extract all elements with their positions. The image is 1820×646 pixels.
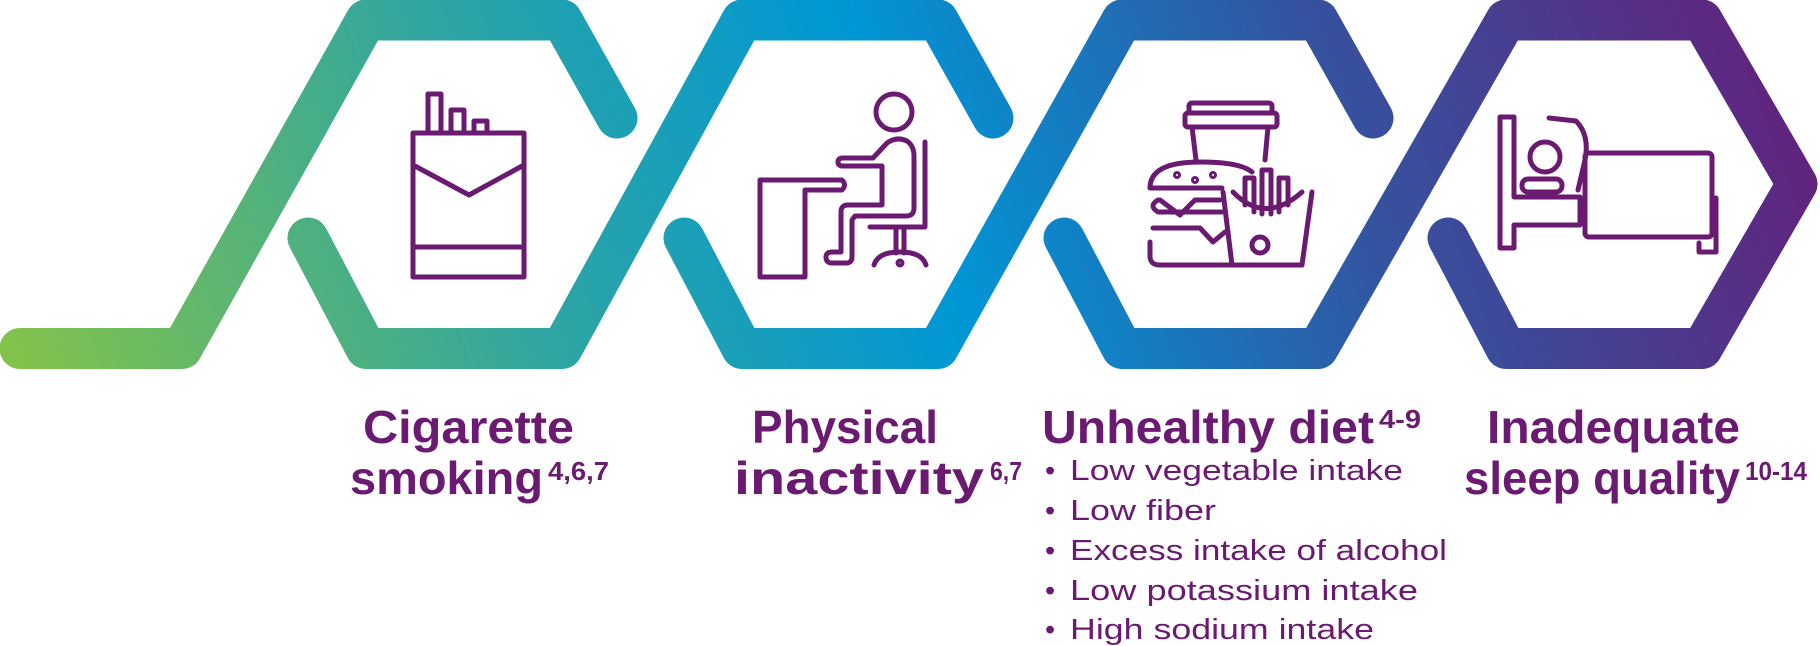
bullet list: diet factors: • [1045, 535, 1055, 567]
label: cigarette smoking: Cigarette [363, 401, 574, 453]
label: inadequate sleep quality: 10-14 [1745, 456, 1808, 486]
label: inadequate sleep quality: sleep quality [1464, 452, 1740, 504]
label: physical inactivity [734, 401, 1022, 504]
bullet list: diet factors: • [1045, 575, 1055, 607]
hexagon chain ribbon [20, 20, 1797, 348]
label: inadequate sleep quality [1464, 401, 1808, 504]
label: unhealthy diet: Unhealthy diet [1042, 401, 1374, 453]
bullet list: diet factors: • [1045, 495, 1055, 527]
label: cigarette smoking [350, 401, 609, 504]
bullet list: diet factors [1045, 455, 1447, 646]
label: cigarette smoking: smoking [350, 452, 543, 504]
icon: person in bed [1500, 117, 1716, 252]
icon: cigarette pack [413, 94, 524, 277]
bullet list: diet factors: • [1045, 614, 1055, 646]
bullet list: diet factors: • [1045, 455, 1055, 487]
label: physical inactivity: 6,7 [990, 456, 1022, 486]
bullet list: diet factors: Low vegetable intake [1070, 455, 1403, 487]
bullet list: diet factors: Low fiber [1070, 495, 1216, 527]
bullet list: diet factors: Low potassium intake [1070, 575, 1418, 607]
label: physical inactivity: inactivity [734, 452, 985, 504]
icon: fast food [1150, 103, 1312, 265]
icon: person at desk [760, 94, 926, 277]
bullet list: diet factors: High sodium intake [1070, 614, 1374, 646]
label: physical inactivity: Physical [752, 401, 938, 453]
label: cigarette smoking: 4,6,7 [548, 456, 609, 486]
label: inadequate sleep quality: Inadequate [1487, 401, 1740, 453]
label: unhealthy diet: 4-9 [1379, 404, 1421, 434]
bullet list: diet factors: Excess intake of alcohol [1070, 535, 1447, 567]
